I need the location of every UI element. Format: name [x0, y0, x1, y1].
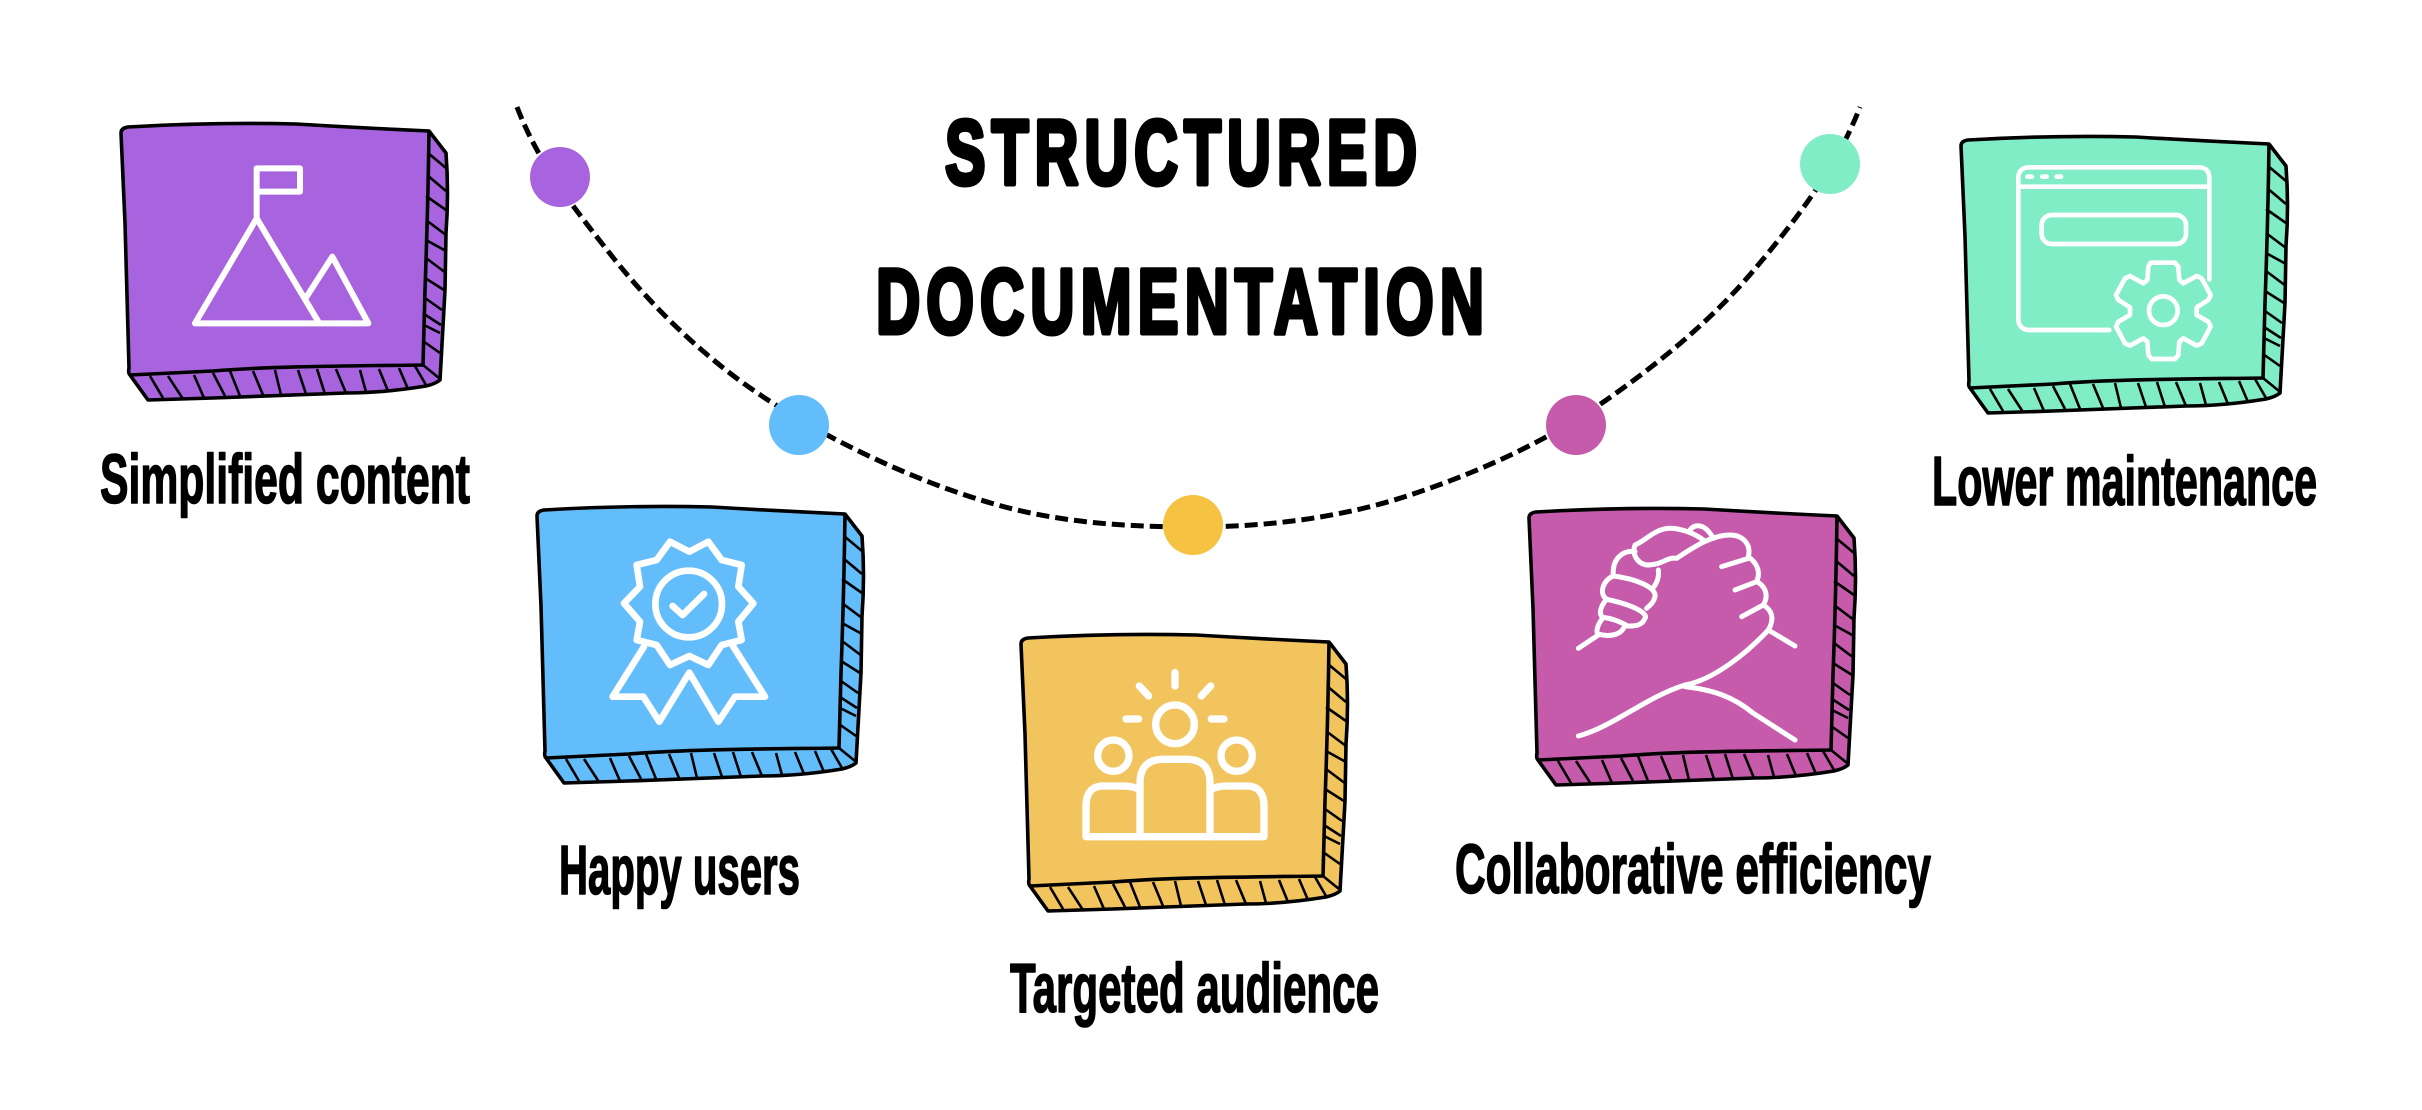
label: happy users: Happy users [559, 831, 800, 909]
title: STRUCTURED [945, 102, 1423, 204]
icon: three people with spotlight [1086, 673, 1264, 837]
label: targeted audience: Targeted audience [1010, 949, 1379, 1027]
panel: happy users [537, 506, 864, 909]
label: collaborative efficiency: Collaborative efficiency [1455, 830, 1931, 908]
panel: simplified content [100, 123, 470, 518]
panel: targeted audience [1010, 634, 1379, 1027]
panel: lower maintenance [1932, 136, 2317, 520]
icon: mountain with flag [195, 168, 368, 323]
icon: clasped hands [1578, 526, 1795, 740]
icon: award ribbon with check [613, 542, 765, 722]
label: simplified content: Simplified content [100, 440, 470, 518]
panel: collaborative efficiency [1455, 508, 1931, 908]
dashed curve connecting the dots [517, 107, 1860, 527]
timeline dots [530, 134, 1860, 555]
icon: browser window with gear [2018, 167, 2211, 359]
title: DOCUMENTATION [876, 251, 1490, 353]
title [876, 102, 1490, 353]
